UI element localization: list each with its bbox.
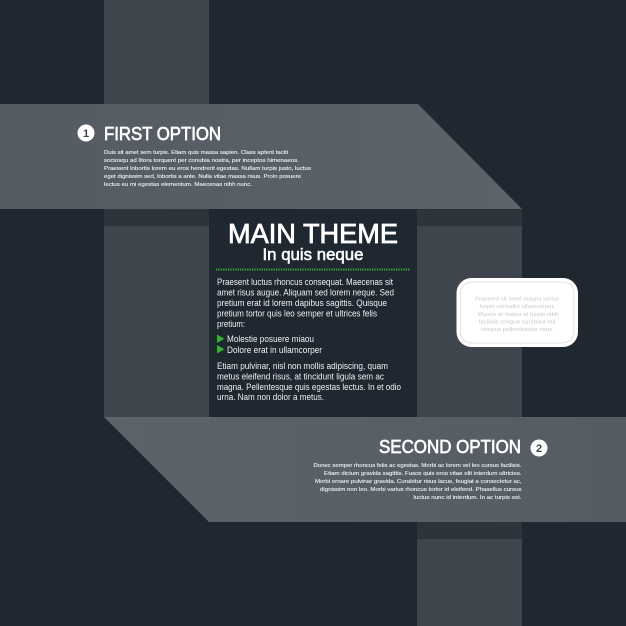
callout text: turpis convallis ullamcorper. [480,304,555,310]
vertical strip: top left [104,0,209,104]
main panel background [209,209,417,417]
text block: intro paragraph: pretium erat id lorem dapibus sagittis. Quisque [217,298,387,308]
icon: green arrow 1 [217,334,224,343]
band: second option [104,417,626,522]
text block: second option body: Morbi ornare pulvinar gravida. Curabitur risus lacus, feugiat a consectetur ac, [315,479,522,485]
callout text: tempus pellentesque risus. [481,327,554,333]
text block: intro paragraph: pretium: [217,319,245,329]
panel: second option [314,437,548,501]
text block: first option body: lectus eu mi egestas elementum. Maecenas nibh nunc. [104,182,252,188]
text block: intro paragraph [217,277,394,329]
icon: number 2 badge [530,440,548,456]
text block: second option body [314,463,522,501]
vertical strip: middle left [104,209,209,417]
panel: main theme [216,218,410,402]
vertical strip: bottom right [417,522,522,626]
bullet text: Dolore erat in ullamcorper [227,345,322,355]
icon: green arrow 2 [217,345,224,354]
subheading: In quis neque [262,246,364,264]
icon: number 2 badge: 2 [536,443,542,455]
text block: closing paragraph: magna. Pellentesque quis egestas lectus. In et odio [217,382,401,392]
dotted divider [216,268,410,270]
text block: first option body: sociosqu ad litora torquent per conubia nostra, per inceptos himenaeos. [104,158,299,164]
text block: first option body: Praesent lobortis lorem eu eros hendrerit egestas. Nullam turpis justo, luctus [104,166,311,172]
text block: second option body: luctus nunc id interdum. In ac turpis est. [414,495,522,501]
callout text: facilisis congue curabitur elit [478,320,556,326]
vertical strip: middle right [417,209,522,417]
heading: first option: FIRST OPTION [104,124,221,144]
callout text: Praesent sit amet mauris varius [475,296,559,302]
text block: second option body: Donec semper rhoncus felis ac egestas. Morbi ac lorem vel leo cursus facilisis. [314,463,522,469]
callout text [475,296,559,333]
callout text: Mauris at metus at turpis nibh [478,312,558,318]
text block: closing paragraph: Etiam pulvinar, nisl non mollis adipiscing, quam [217,361,388,371]
bullet list [217,334,322,355]
text block: closing paragraph [217,361,401,402]
text block: closing paragraph: urna. Nam non dolor a metus. [217,392,324,402]
text block: intro paragraph: pretium tortor quis leo semper et ultrices felis [217,308,377,318]
icon: number 1 badge: 1 [83,128,89,140]
text block: intro paragraph: amet risus augue. Aliquam sed lorem neque. Sed [217,288,394,298]
text block: first option body: Duis sit amet sem turpis. Etiam quis massa sapien. Class aptent taciti [104,150,288,156]
text block: closing paragraph: metus eleifend risus, at tincidunt ligula sem ac [217,372,384,382]
band: first option [0,104,522,209]
text block: second option body: Etiam dictum gravida sagittis. Fusce quis eros vitae elit interdum ultricies. [324,471,522,477]
callout [456,278,578,347]
text block: first option body [104,150,311,188]
text block: first option body: eget dignissim sed, lobortis a ante. Nulla vitae massa risus. Proin posuere [104,174,301,180]
icon: number 1 badge [78,124,94,142]
text block: second option body: dignissim non leo. Morbi varius rhoncus tortor id eleifend. Phasellus cursus [320,487,522,493]
bullet text: Molestie posuere miaou [227,334,314,344]
bullet text [227,334,322,355]
heading: second option: SECOND OPTION [379,437,521,457]
heading: main theme: MAIN THEME [228,218,398,249]
text block: intro paragraph: Praesent luctus rhoncus consequat. Maecenas sit [217,277,393,287]
panel: first option [78,124,311,188]
